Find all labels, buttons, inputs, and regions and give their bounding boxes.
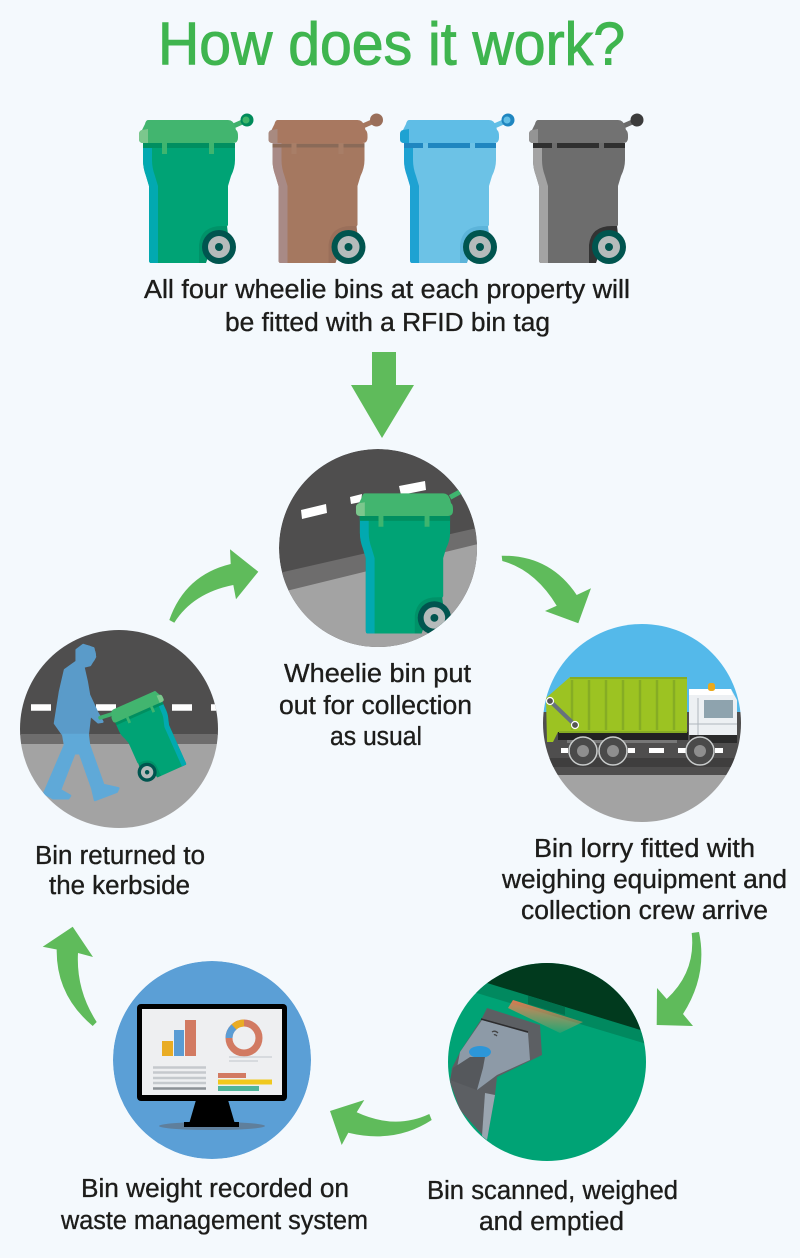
panel: monitor <box>113 961 311 1159</box>
intro text: be fitted with a RFID bin tag <box>225 309 550 337</box>
bin row: four wheelie bins <box>139 114 644 264</box>
intro text <box>144 276 630 337</box>
arrow: to top <box>169 549 258 623</box>
label: returned: Bin returned to <box>35 842 205 870</box>
arrow: to scanner <box>657 932 701 1026</box>
label: scanned <box>427 1177 678 1236</box>
label: bin lorry: weighing equipment and <box>501 866 787 894</box>
panel: bin lorry <box>540 620 744 825</box>
icon: blue bin <box>400 114 514 264</box>
label: recorded <box>60 1175 368 1235</box>
icon: grey bin <box>529 114 644 264</box>
label: returned: the kerbside <box>49 872 190 900</box>
title: How does it work? <box>158 10 625 78</box>
arrow: to person <box>43 927 97 1026</box>
label: bin put out: out for collection <box>279 692 472 720</box>
panel: bin put out <box>279 449 477 647</box>
label: bin lorry <box>501 835 787 925</box>
label: bin lorry: Bin lorry fitted with <box>534 835 755 863</box>
label: returned <box>35 842 205 900</box>
label: recorded: waste management system <box>60 1207 368 1235</box>
intro text: All four wheelie bins at each property will <box>144 276 630 304</box>
label: bin put out: as usual <box>330 723 422 751</box>
label: bin lorry: collection crew arrive <box>521 897 768 925</box>
panel: scanner <box>448 963 646 1161</box>
label: bin put out: Wheelie bin put <box>284 660 471 688</box>
arrow: down <box>351 352 414 438</box>
arrow: to monitor <box>330 1100 432 1145</box>
icon: brown bin <box>268 114 383 264</box>
panel: returned <box>20 630 218 828</box>
label: scanned: and emptied <box>479 1208 624 1236</box>
label: recorded: Bin weight recorded on <box>81 1175 349 1203</box>
label: scanned: Bin scanned, weighed <box>427 1177 678 1205</box>
arrow: to lorry <box>502 556 591 623</box>
icon: green bin <box>139 114 254 264</box>
label: bin put out <box>279 660 472 751</box>
